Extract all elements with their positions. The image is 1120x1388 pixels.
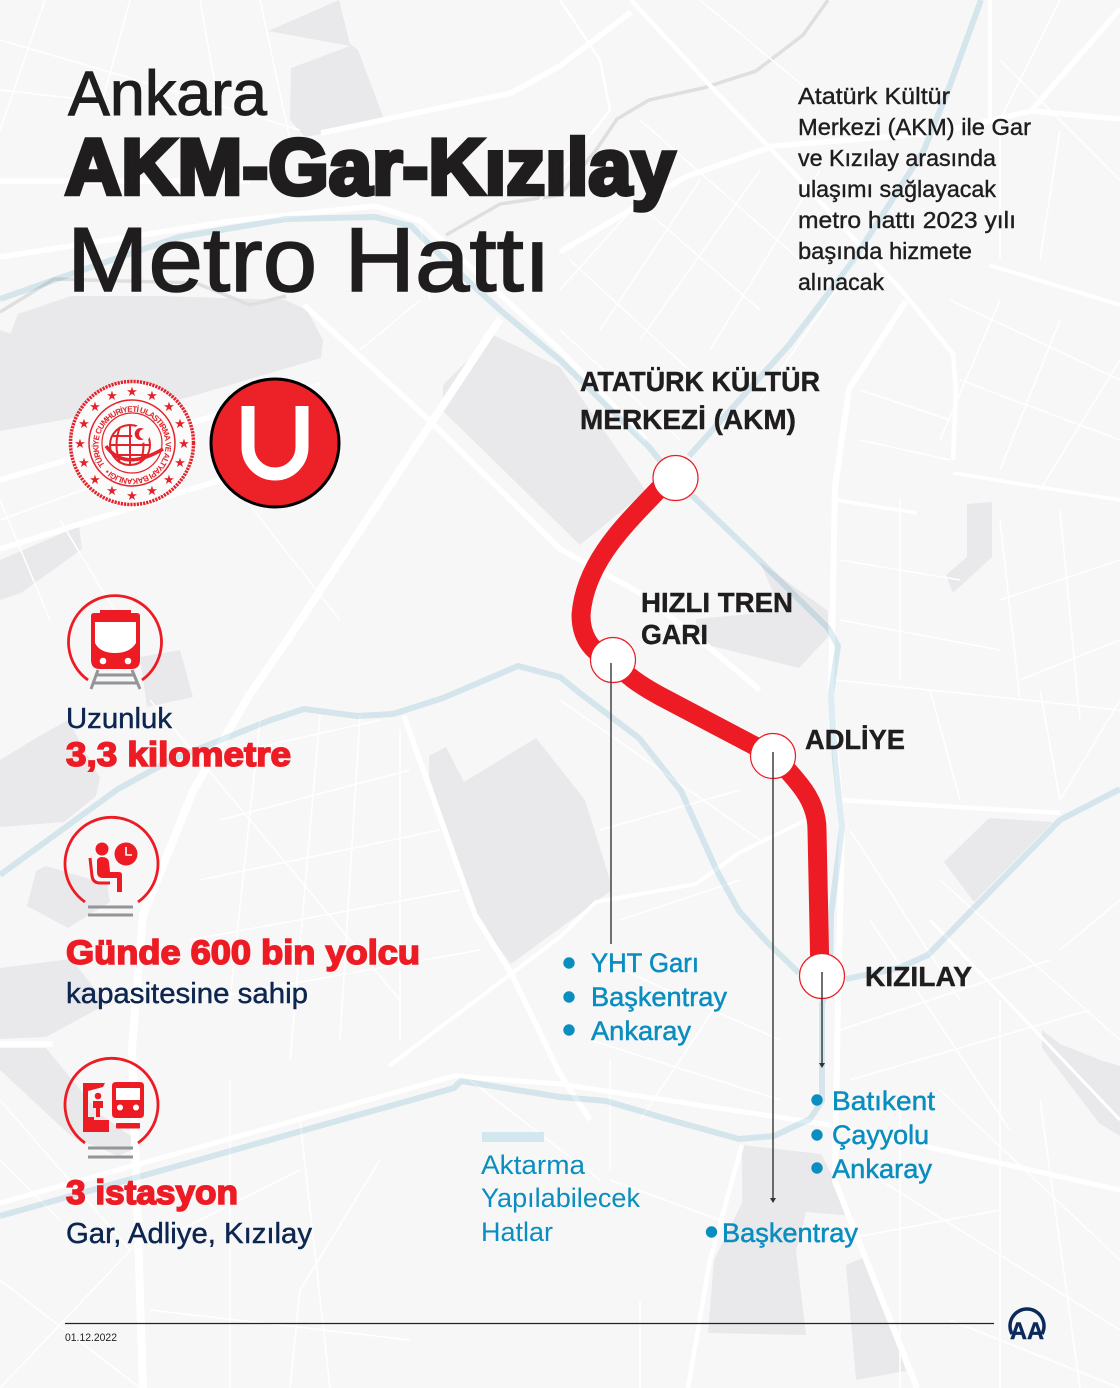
text: length: 3,3 kilometre xyxy=(66,736,291,774)
station: Hızlı Tren Garı: HIZLI TREN xyxy=(641,587,793,618)
logo: ministry seal: ★ xyxy=(126,489,138,504)
text: stations xyxy=(66,1174,312,1250)
legend: Hatlar xyxy=(481,1217,553,1247)
transfer list: Gar: Başkentray xyxy=(591,982,727,1012)
station: Hızlı Tren Garı xyxy=(590,587,793,682)
description text: alınacak xyxy=(798,269,884,295)
logo: ministry seal: ★ xyxy=(174,417,186,432)
title: AKM-Gar-Kızılay xyxy=(65,122,675,211)
title: Metro Hattı xyxy=(67,210,551,311)
transfer list: Kızılay: Ankaray xyxy=(832,1154,932,1184)
icon: station xyxy=(65,1058,158,1157)
transfer list: Kızılay: Çayyolu xyxy=(832,1120,929,1150)
logo: ministry seal: ★ xyxy=(126,385,138,400)
description text xyxy=(798,83,1031,295)
transfer list: Gar: Ankaray xyxy=(591,1016,691,1046)
logo: ministry seal: ★ xyxy=(146,389,158,404)
text: length xyxy=(66,703,291,774)
text: capacity: kapasitesine sahip xyxy=(66,978,308,1010)
legend xyxy=(481,1132,640,1247)
icon: train xyxy=(68,596,162,689)
transfer list: Gar xyxy=(563,948,727,1046)
text: length: Uzunluk xyxy=(66,703,172,735)
description text: başında hizmete xyxy=(798,238,972,264)
description text: ulaşımı sağlayacak xyxy=(798,176,997,202)
title: Ankara xyxy=(68,59,268,129)
logo: ministry seal: ★ xyxy=(106,484,118,499)
metro route line xyxy=(581,478,820,976)
description text: Atatürk Kültür xyxy=(798,83,950,109)
logo: ministry seal: ★ xyxy=(163,400,175,415)
transfer list: Gar: YHT Garı xyxy=(591,948,699,978)
description text: metro hattı 2023 yılı xyxy=(798,207,1016,233)
logo: ministry seal: ★ xyxy=(163,473,175,488)
connector line: Gar xyxy=(610,663,612,944)
text: stations: Gar, Adliye, Kızılay xyxy=(66,1218,312,1250)
station: Kızılay xyxy=(800,954,972,998)
station: Adliye: ADLİYE xyxy=(805,724,905,755)
logo: AA: AA xyxy=(1010,1318,1044,1345)
logo: ministry seal: ★ xyxy=(174,456,186,471)
description text: Merkezi (AKM) ile Gar xyxy=(798,114,1031,140)
text: stations: 3 istasyon xyxy=(66,1174,238,1212)
station: AKM: ATATÜRK KÜLTÜR xyxy=(580,366,820,397)
arrow: Adliye to Başkentray xyxy=(770,752,776,1203)
logo: ministry seal: ★ xyxy=(146,484,158,499)
text: capacity xyxy=(66,934,420,1010)
legend: Yapılabilecek xyxy=(481,1183,640,1213)
title xyxy=(65,59,675,311)
station: Kızılay: KIZILAY xyxy=(865,961,972,992)
icon: passenger xyxy=(65,817,158,915)
text: capacity: Günde 600 bin yolcu xyxy=(66,934,420,972)
station: Adliye xyxy=(750,724,905,778)
logo: ministry seal: ★ xyxy=(178,437,190,452)
arrow: Kızılay to lines xyxy=(819,972,825,1068)
transfer list: Kızılay xyxy=(811,1086,936,1184)
logo: ministry seal xyxy=(68,380,196,506)
station: AKM: MERKEZİ (AKM) xyxy=(580,404,796,435)
station: Hızlı Tren Garı: GARI xyxy=(641,619,708,650)
transfer list: Kızılay: Batıkent xyxy=(832,1086,936,1116)
description text: ve Kızılay arasında xyxy=(798,145,996,171)
logo: U metro sign xyxy=(211,379,339,507)
station: AKM xyxy=(580,366,820,500)
transfer: Adliye Başkentray: Başkentray xyxy=(722,1218,858,1248)
logo: ministry seal: ★ xyxy=(106,389,118,404)
legend: Aktarma xyxy=(481,1150,586,1180)
footer: rule and date: 01.12.2022 xyxy=(65,1332,117,1344)
logo: ministry seal: ★ xyxy=(89,473,101,488)
logo: ministry seal: TÜRKİYE CUMHURİYETİ ULAŞTIRMA VE ALTYAPI BAKANLIĞI • xyxy=(92,405,172,484)
logo: ministry seal: ★ xyxy=(89,400,101,415)
logo: ministry seal: ★ xyxy=(74,437,86,452)
logo: ministry seal: ★ xyxy=(78,417,90,432)
logo: ministry seal: ★ xyxy=(78,456,90,471)
